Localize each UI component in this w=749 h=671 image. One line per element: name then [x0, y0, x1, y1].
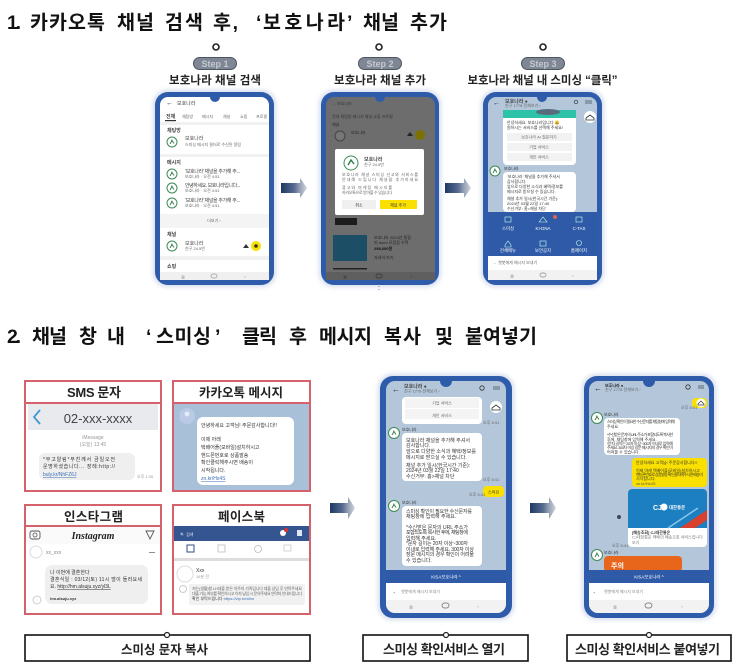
arrow: copy to open service [330, 497, 355, 519]
panel: SMS message: buly.kr/NhFZ6J [43, 472, 77, 478]
phone 4: open smishing service: 포함되도록 복사한 후에, 채팅창에 [406, 529, 468, 536]
phone 5: paste message [582, 374, 716, 620]
phone 3: chatroom menu: 스미싱 [502, 225, 514, 232]
panel: KakaoTalk message: 택배어플(모바일)설치하시고 [201, 444, 260, 451]
heading: section 2: 내 [107, 326, 125, 348]
phone 2: add channel dialog: ← 보호나라 [332, 100, 352, 106]
heading: section 1: ’ [347, 12, 352, 34]
panel: Facebook message: 저는(생활)형 LH대출 받은 차주의 가족입니다 대출 상담 후 연락주세요 [192, 585, 302, 591]
phone 1: channel search: 메시지 [202, 113, 213, 119]
heading: section 2: 채널 [32, 326, 67, 348]
phone 3: chatroom menu: 원하시는 서비스를 선택해 주세요! [507, 124, 563, 130]
panel: SMS message: iMessage [82, 435, 104, 441]
SMS heading: SMS 문자 [67, 385, 121, 400]
panel: Instagram message: 요. http://hm.alsuju.xyz/yl3L [50, 584, 111, 590]
phone 4: open smishing service: 장문 메시지의 경우 확인이 어려울 [406, 551, 474, 558]
panel: Instagram message [25, 505, 161, 614]
phone 3: chatroom menu: ‹ [572, 273, 574, 278]
phone 1: channel search: 친구 24.5만 [185, 245, 205, 251]
heading: section 2: 복사 [384, 326, 421, 348]
heading: section 2: 창 [79, 326, 97, 348]
heading: section 1: 채널 [117, 12, 154, 34]
phone 3: chatroom menu: 채널 추가 일시(한국시간 기준): [507, 195, 558, 201]
panel: KakaoTalk message [173, 381, 310, 491]
KakaoTalk heading: 카카오톡 메시지 [199, 385, 283, 400]
step 3 marker: Step 3 [529, 59, 557, 69]
phone 5: paste message: ‹ [681, 604, 683, 609]
phone 3: chatroom menu: 보호나라 ● [505, 98, 528, 105]
phone 3: chatroom menu: 보호나라 AI 질문하기 [521, 134, 557, 140]
phone 1: channel search: 보호나라 [185, 135, 204, 142]
phone 4: open smishing service: 기업 서비스 [432, 400, 452, 406]
phone 4: open smishing service: 개인 서비스 [432, 412, 452, 418]
panel: Instagram message: xx_xxx [46, 550, 62, 556]
phone 4: open smishing service [378, 374, 514, 620]
panel: Facebook message: 확인 부탁드립니다 https://vip.kr/x8m [192, 595, 255, 601]
label box: copy smishing text: 스미싱 문자 복사 [121, 643, 208, 657]
phone 4: open smishing service: *수신받은 문자의 URL 주소가 [406, 524, 468, 531]
phone 1: channel search: 채팅방 [182, 113, 193, 119]
phone 5: paste message: [배송조회] CJ대한통운 [632, 529, 671, 535]
label box: copy smishing text [25, 632, 310, 661]
phone 5: paste message: CJ대한통운 택배의 배송조회 서비스입니다 [632, 534, 703, 540]
phone 5: paste message: 스미싱 확인이 필요한 수신문자를 채팅창에 입력해 [607, 418, 675, 424]
phone 1: channel search: 보호나라 · 오전 4:51 [185, 173, 220, 179]
phone 3: chatroom menu: ← 챗봇에게 메시지 보내기 [493, 259, 537, 265]
phone 4: open smishing service: 채팅창에 입력해 주세요. [406, 513, 456, 520]
phone 4: open smishing service: 2024년 03월 22일 17:40 [406, 467, 459, 474]
phone 1: channel search: 메시지 [167, 159, 181, 166]
phone 3: chatroom menu: 수신거부: 홈>채널 차단 [507, 205, 546, 211]
phone 3: chatroom menu: KI-DNA [536, 226, 551, 231]
phone 4: open smishing service: 수신거부: 홈>채널 차단 [406, 473, 455, 480]
panel: SMS message: 운명하셨습니다... 장례:http:// [43, 463, 116, 470]
phone 5: paste message: 주세요. [607, 423, 619, 429]
phone 1: channel search: 보호나라 [177, 100, 196, 107]
phone 1: channel search: 보호나라 · 오전 4:51 [185, 187, 220, 193]
phone 4: open smishing service: 보호나라 [402, 499, 417, 505]
heading: section 2: 클릭 [242, 326, 277, 348]
phone 1: channel search: 보호나라 [185, 240, 204, 247]
heading: section 2 [7, 326, 537, 348]
phone 3: chatroom menu: 2024년 03월 22일 17:40 [507, 200, 550, 206]
phone 5: paste message: 보호나라 [604, 411, 619, 417]
phone 2: add channel dialog: 보호나라 2024년 종합 [374, 234, 411, 240]
phone 5: paste message: 주세요. 300자 이상 장문 메시지의 경우 확인이 [607, 444, 673, 450]
panel: Facebook message: 16분 전 [196, 573, 209, 579]
phone 5: paste message: 어려울 수 있습니다. [607, 448, 640, 454]
phone 2: add channel dialog: 보호나라 [351, 129, 366, 135]
phone 5: paste message: *문자 길이는 20자 이상~300자 이내로 입력해 [607, 440, 673, 446]
panel: Facebook message [173, 505, 310, 614]
phone 4: open smishing service: 보호나라 ● [404, 383, 427, 390]
phone 2: add channel dialog: ||| [343, 274, 347, 279]
phone 3: chatroom menu: ||| [510, 273, 514, 278]
phone 1: channel search: 쇼핑 [167, 263, 177, 270]
heading: section 2: 2. [7, 326, 21, 348]
heading: section 2: ’ [215, 326, 220, 348]
phone 4: open smishing service: 오후 5:41 [469, 491, 486, 497]
panel: Instagram message: Instagram [71, 531, 115, 542]
phone 2: add channel dialog [319, 90, 441, 287]
phone 4: open smishing service: ← [392, 385, 400, 394]
phone 2: add channel dialog: 취소 [355, 202, 363, 208]
phone 1: channel search: 채널 [223, 113, 231, 119]
phone 3: chatroom menu: ‘보호나라’ 채널을 추가해 주셔서 [507, 173, 560, 179]
phone 2: add channel dialog: 미 mom 모음집 수학 [374, 239, 409, 245]
Instagram heading: 인스타그램 [64, 510, 123, 524]
arrow: step 2 to step 3 [445, 178, 471, 198]
phone 4: open smishing service: 입력해 주세요. [406, 535, 436, 542]
phone 5: paste message: 보호나라 [604, 549, 619, 555]
phone 5: paste message: ← [594, 384, 602, 393]
phone 4: open smishing service: 앞으로 다양한 소식과 혜택/정보를 [406, 448, 476, 455]
phone 4: open smishing service: 스미싱 [488, 488, 499, 494]
panel: Facebook message: 대출 가능 여부를 확인하시고 이자 납입 시 문의주세요 연락처 안내드립니다 [192, 590, 302, 596]
phone 2: add channel dialog: 298,000원 [374, 245, 392, 251]
phone 3: chatroom menu: 전체메뉴 [500, 247, 516, 254]
panel: Instagram message: 나 이번에 결혼한다 [50, 569, 90, 576]
phone 5: paste message: ||| [613, 604, 617, 609]
phone 2: add channel dialog: 채널 [332, 121, 340, 127]
phone 4: open smishing service: 보호나라 채널을 추가해 주셔서 [406, 437, 470, 444]
phone 3: chatroom menu: 감사합니다. [507, 178, 527, 184]
phone 5: paste message: CJ [653, 505, 662, 512]
panel: Facebook message: Xxx [196, 568, 205, 574]
panel: KakaoTalk message: 이제 아래 [201, 436, 221, 443]
heading: section 1: 검색 [165, 12, 203, 34]
heading: section 2: 스미싱 [156, 326, 211, 348]
phone 4: open smishing service: ‹ [477, 604, 479, 609]
phone 5: paste message: + [593, 590, 596, 595]
heading: section 1: 후, [213, 12, 238, 34]
heading: section 2: 및 [435, 326, 453, 348]
panel: KakaoTalk message: 핸드폰번호로 상품발송 [201, 452, 249, 459]
panel: Instagram message: hm.alsuju.xyz [50, 596, 76, 601]
step 2 marker [358, 44, 402, 70]
panel: KakaoTalk message: 확인클릭해주시면 배송이 [201, 459, 253, 466]
heading: section 1: 추가 [410, 12, 447, 34]
step 3 caption: 보호나라 채널 내 스미싱 “클릭” [468, 73, 618, 87]
phone 5: paste message: 보기 [632, 539, 640, 545]
panel: KakaoTalk message: 안녕하세요 고객님! 주문감사합니다!! [201, 422, 277, 429]
panel: SMS message: (오늘) 13:45 [80, 441, 106, 448]
phone 2: add channel dialog: 친구 24.5만 [364, 161, 384, 167]
phone 1: channel search: 채널 [167, 231, 177, 238]
phone 5: paste message: 오후 5:41 [681, 404, 698, 410]
heading: section 1: 채널 [363, 12, 399, 34]
phone 5: paste message: 대한통운 [669, 504, 685, 511]
phone 3: chatroom menu: 보안공지 [535, 247, 551, 254]
phone 2: add channel dialog: 보호나라 채널 스미싱 신고와 서비스를 [342, 171, 418, 177]
phone 2: add channel dialog: 보호나라 [364, 156, 383, 163]
step 1 marker [194, 44, 236, 70]
phone 1: channel search: ‘보호나라’ 채널을 추가해 주... [185, 168, 240, 175]
phone 1: channel search: 채팅방 [167, 127, 181, 134]
heading: section 1: 1. [7, 12, 21, 34]
phone 3: chatroom menu [481, 90, 604, 287]
phone 1: channel search: ← [166, 100, 173, 107]
phone 1: channel search: 프로필 [256, 113, 267, 119]
phone 4: open smishing service: 보호나라 [402, 426, 417, 432]
phone 5: paste message: 주의 [611, 561, 624, 570]
panel: SMS message: 02-xxx-xxxx [64, 411, 133, 426]
heading: section 1: 보호나라 [263, 12, 345, 34]
phone 5: paste message: zn.kr/Hx4S [636, 481, 656, 486]
phone 4: open smishing service: + [393, 590, 396, 595]
panel: SMS message: *부고알림*부친께서 금일오전 [43, 456, 115, 463]
phone 1: channel search: 안녕하세요. 보호나라입니다... [185, 182, 240, 189]
phone 1: channel search: ||| [181, 274, 185, 279]
phone 4: open smishing service: 채널 추가 일시(한국시간 기준): [406, 462, 470, 469]
Facebook heading: 페이스북 [218, 510, 265, 524]
phone 1: channel search: ‹ [244, 274, 246, 279]
phone 1: channel search: 스미싱 메시지 필터로 수신된 알림 [185, 141, 241, 147]
phone 3: chatroom menu: 메시지로 받으실 수 있습니다. [507, 188, 556, 194]
phone 5: paste message: 안녕하세요 고객님! 주문감사합니다!! [636, 459, 697, 465]
phone 3: chatroom menu: 앞으로 다양한 소식과 혜택/정보를 [507, 183, 563, 189]
step 2 caption: 보호나라 채널 추가 [334, 73, 426, 87]
phone 1: channel search: 쇼핑 [240, 113, 248, 119]
phone 3: chatroom menu: 친구 1778 전체보기 › [505, 102, 541, 108]
phone 4: open smishing service: *문자 길이는 20자 이상~300자 [406, 540, 468, 547]
phone 1: channel search: 전체 [166, 113, 176, 120]
phone 3: chatroom menu: 보호나라 [504, 165, 519, 171]
phone 3: chatroom menu: 기업 서비스 [529, 144, 549, 150]
phone 1: channel search: ‘보호나라’ 채널을 추가해 주... [185, 197, 240, 204]
phone 4: open smishing service: KISA보호나라 ^ [431, 574, 462, 580]
phone 2: add channel dialog: 자세히 보기 [374, 254, 394, 260]
phone 2: add channel dialog: ‹ [410, 274, 412, 279]
step 3 marker [522, 44, 564, 70]
phone 4: open smishing service: 오후 5:31 [483, 419, 500, 425]
phone 1: channel search: 더보기 › [207, 217, 221, 223]
heading: section 1: 카카오톡 [30, 12, 105, 34]
heading: section 2: 붙여넣기 [465, 326, 537, 348]
phone 5: paste message: 친구 1778 전체보기 › [605, 386, 641, 392]
phone 5: paste message: 보호나라 ● [605, 382, 624, 388]
phone 2: add channel dialog: 카카오톡으로 받아볼 수 있습니다 [342, 189, 392, 195]
phone 5: paste message: 챗봇에게 메시지 보내기 [604, 588, 643, 594]
phone 4: open smishing service: 스미싱 확인이 필요한 수신문자를 [406, 508, 472, 515]
heading: section 2: ‘ [146, 326, 151, 348]
phone 3: chatroom menu: 개인 서비스 [529, 154, 549, 160]
arrow: step 1 to step 2 [281, 178, 307, 198]
panel: SMS message: 오후 1:35 [137, 473, 154, 479]
panel: KakaoTalk message: 시작됩니다. [201, 467, 225, 474]
phone 3: chatroom menu: C-TAS [573, 226, 585, 231]
phone 1: channel search [153, 90, 276, 287]
panel: KakaoTalk message: zn.kr/Hx4S [201, 476, 226, 482]
phone 4: open smishing service: 이내로 입력해 주세요. 300자 이상 [406, 546, 474, 553]
heading: section 2: 메시지 [319, 326, 372, 348]
phone 5: paste message: 후에, 채팅창에 입력해 주세요. [607, 436, 657, 442]
phone 5: paste message: *수신받은 문자의 URL 주소가 포함되도록 복사한 [607, 431, 673, 437]
heading: section 1 [7, 12, 447, 34]
phone 3: chatroom menu: ← [493, 100, 500, 107]
phone 4: open smishing service: 감사합니다. [406, 442, 430, 449]
label box: open smishing check service: 스미싱 확인서비스 열기 [383, 642, 505, 657]
step 2 marker: Step 2 [366, 59, 394, 69]
phone 5: paste message: 이제 아래 택배어플(모바일)설치하시고 [636, 467, 700, 473]
phone 5: paste message: 오후 5:41 [612, 542, 629, 548]
phone 2: add channel dialog: 전체 채팅방 메시지 채널 쇼핑 프로필 [332, 113, 393, 119]
phone 3: chatroom menu: 안녕하세요. 보호나라입니다 😀 [507, 119, 559, 125]
phone 3: chatroom menu: 홈페이지 [571, 247, 587, 254]
panel: SMS message [25, 381, 161, 491]
phone 4: open smishing service: 친구 1778 전체보기 › [404, 388, 440, 394]
phone 1: channel search: 보호나라 · 오전 4:51 [185, 202, 220, 208]
phone 4: open smishing service: 수 있습니다. [406, 557, 432, 564]
label box: paste into smishing check service [567, 632, 731, 661]
phone 4: open smishing service: 챗봇에게 메시지 보내기 [401, 588, 440, 594]
scroll dots under phone 2: : [378, 285, 380, 292]
label box: paste into smishing check service: 스미싱 확인서비스 붙여넣기 [575, 642, 720, 657]
arrow: open service to paste [530, 497, 556, 519]
step 1 marker: Step 1 [201, 59, 229, 69]
panel: Instagram message: 결혼식일 : 03/12(토) 11시 많이 들러요세 [50, 576, 142, 583]
phone 4: open smishing service: ||| [409, 604, 413, 609]
phone 5: paste message: 시작됩니다. [636, 475, 656, 481]
phone 5: paste message: KISA보호나라 ^ [634, 574, 665, 580]
label box: open smishing check service [363, 632, 528, 661]
phone 5: paste message: 핸드폰번호로 상품발송 확인클릭해주시면 배송이 [636, 471, 703, 477]
phone 2: add channel dialog: 광고와 마케팅 메시지를 [342, 184, 392, 190]
step 1 caption: 보호나라 채널 검색 [169, 73, 261, 87]
heading: section 1: ‘ [256, 12, 261, 34]
phone 2: add channel dialog: 안내해 드립니다 채널을 추가하세요 [342, 176, 418, 182]
phone 4: open smishing service: 오후 5:41 [483, 476, 500, 482]
heading: section 2: 후 [289, 326, 307, 348]
phone 4: open smishing service: 메시지로 받으실 수 있습니다. [406, 454, 467, 461]
phone 2: add channel dialog: 채널 추가 [390, 202, 406, 208]
panel: Facebook message: 🔍 검색 [180, 531, 194, 537]
